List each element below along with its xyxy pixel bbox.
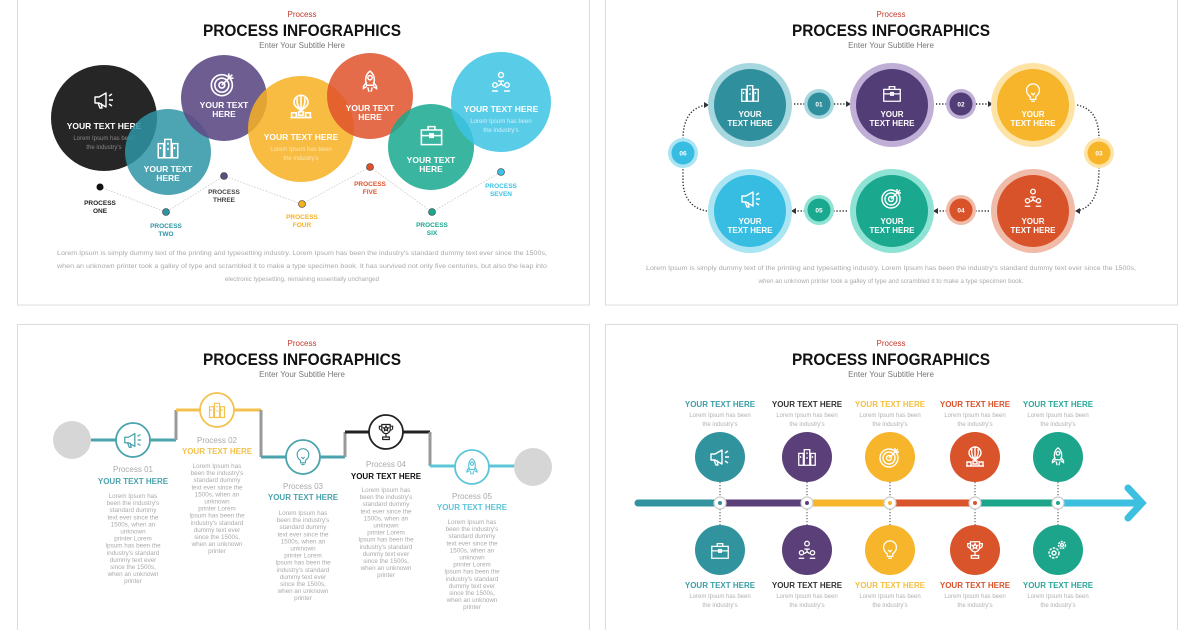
circle: process four: the industry's (283, 156, 319, 162)
step texts: YOUR TEXT HERE (268, 493, 339, 502)
top labels (685, 400, 1094, 428)
step circle 01: TEXT HERE (728, 119, 773, 128)
step texts: YOUR TEXT HERE (437, 503, 508, 512)
step texts: text ever since the (277, 531, 329, 538)
process labels with dots: ONE (93, 208, 108, 215)
step texts: dummy text ever (363, 551, 409, 558)
step texts: Process 01 (113, 465, 154, 474)
step texts: Process 02 (197, 436, 238, 445)
step texts: standard dummy (194, 477, 241, 484)
step texts: Ipsum has been the (275, 560, 331, 567)
circle: process one: Lorem Ipsum has been (73, 136, 135, 142)
step texts: since the 1500s, (194, 534, 240, 541)
step texts: Lorem Ipsum has (193, 463, 241, 470)
number badges: 03 (1095, 150, 1103, 158)
step texts: standard dummy (110, 507, 157, 514)
circle: process seven: Lorem Ipsum has been (470, 119, 532, 125)
step circle 05: TEXT HERE (870, 226, 915, 235)
top icon circles (695, 432, 1083, 482)
step texts: printer Lorem (453, 562, 491, 569)
step texts: when an unknown (360, 565, 412, 572)
top labels: Lorem Ipsum has been (944, 413, 1006, 419)
circle: process four (248, 76, 354, 182)
top labels: YOUR TEXT HERE (772, 400, 843, 409)
step circle 06 (708, 169, 792, 253)
circle: process two (125, 109, 211, 195)
step texts: Lorem Ipsum has (448, 519, 496, 526)
process labels with dots: FIVE (363, 189, 378, 196)
circle: process six: YOUR TEXT (407, 155, 456, 165)
heading: top-right: Enter Your Subtitle Here (848, 41, 934, 50)
step circle 04 (991, 169, 1075, 253)
end circles (53, 421, 91, 459)
bottom labels: YOUR TEXT HERE (1023, 581, 1094, 590)
bottom labels: YOUR TEXT HERE (685, 581, 756, 590)
heading: top-left: Process (288, 10, 316, 19)
step texts: when an unknown (277, 588, 329, 595)
heading: top-right (792, 10, 990, 50)
step texts: been the industry's (191, 470, 243, 477)
bottom labels: the industry's (872, 603, 908, 609)
step texts: been the industry's (107, 500, 159, 507)
step texts: unknown (459, 554, 485, 562)
step texts: Ipsum has been the (105, 543, 161, 550)
top labels: the industry's (872, 422, 908, 428)
bottom labels: Lorem Ipsum has been (776, 594, 838, 600)
step circle 06: YOUR (738, 217, 762, 226)
heading: bottom-left: Process (288, 339, 316, 348)
step texts: standard dummy (280, 524, 327, 531)
step texts: printer Lorem (114, 536, 152, 543)
circle: process four: Lorem Ipsum has been (270, 147, 332, 153)
process labels with dots: THREE (213, 197, 236, 204)
step texts: industry's standard (360, 544, 413, 551)
circle: process seven (451, 52, 551, 152)
process labels with dots (84, 164, 518, 238)
top labels: Lorem Ipsum has been (689, 413, 751, 419)
heading: top-left (203, 10, 401, 50)
step texts: Ipsum has been the (189, 513, 245, 520)
step texts: since the 1500s, (280, 581, 326, 588)
step circle 01 (708, 63, 792, 147)
step texts: Process 05 (452, 492, 493, 501)
circle: process seven: the industry's (483, 128, 519, 134)
step texts: Lorem Ipsum has (362, 487, 410, 494)
step texts: standard dummy (449, 533, 496, 540)
bottom labels: Lorem Ipsum has been (859, 594, 921, 600)
paragraph: top-left: electronic typesetting, remaining essentially unchanged (225, 276, 380, 283)
heading: bottom-right (792, 339, 990, 379)
panel: bottom-left steps (18, 324, 590, 630)
circle: process three: YOUR TEXT (200, 100, 249, 110)
bottom labels: the industry's (702, 603, 738, 609)
step texts: when an unknown (107, 571, 159, 578)
step texts: 1500s, when an (195, 491, 240, 498)
circle: process two: HERE (156, 173, 180, 183)
step texts: printer Lorem (284, 553, 322, 560)
step texts: dummy text ever (280, 574, 326, 581)
process labels with dots: TWO (158, 231, 174, 238)
number badges: 05 (815, 208, 823, 214)
step texts (98, 436, 508, 611)
bottom labels: the industry's (1040, 603, 1076, 609)
step texts: Ipsum has been the (358, 537, 414, 544)
top labels: YOUR TEXT HERE (940, 400, 1011, 409)
step circle 01: YOUR (738, 110, 762, 119)
number badges: 04 (957, 208, 965, 214)
circle: process two: YOUR TEXT (144, 164, 193, 174)
top labels: the industry's (1040, 422, 1076, 428)
circle: process one: the industry's (86, 145, 122, 151)
step circle 04: YOUR (1021, 217, 1045, 226)
step circle 05 (850, 169, 934, 253)
step texts: text ever since the (107, 514, 159, 521)
paragraph: top-right: Lorem Ipsum is simply dummy text of the printing and typesetting industry. Lorem Ipsum has been the industry's standard dummy text ever since the 1500s, (646, 265, 1136, 272)
step texts: dummy text ever (194, 527, 240, 534)
bottom labels: Lorem Ipsum has been (1027, 594, 1089, 600)
paragraph: top-left (56, 250, 548, 283)
step texts: been the industry's (360, 494, 412, 501)
step line (91, 410, 515, 466)
panel: top-right cycle (606, 0, 1178, 305)
step texts: industry's standard (107, 550, 160, 557)
circle: process one (51, 65, 157, 171)
step texts: printer Lorem (198, 506, 236, 513)
step texts: been the industry's (277, 517, 329, 524)
process labels with dots: PROCESS (416, 222, 449, 229)
heading: bottom-right: PROCESS INFOGRAPHICS (792, 350, 990, 369)
step circle 03: TEXT HERE (1011, 119, 1056, 128)
step texts: standard dummy (363, 501, 410, 508)
number badges (668, 89, 1114, 225)
bottom labels: Lorem Ipsum has been (689, 594, 751, 600)
top labels: the industry's (957, 422, 993, 428)
heading: top-right: PROCESS INFOGRAPHICS (792, 21, 990, 40)
process labels with dots: PROCESS (150, 223, 183, 230)
circle: process six: HERE (419, 164, 443, 174)
paragraph: top-left: when an unknown printer took a galley of type and scrambled it to make a type specimen book. It has survived not only five centuries, but also the leap into (56, 263, 548, 270)
step texts: text ever since the (191, 484, 243, 491)
bottom labels (685, 581, 1094, 609)
top labels: Lorem Ipsum has been (1027, 413, 1089, 419)
icon circles (116, 393, 489, 484)
step texts: 1500s, when an (281, 538, 326, 545)
step texts: industry's standard (277, 567, 330, 574)
number badges: 06 (679, 150, 687, 158)
heading: bottom-right: Process (877, 339, 905, 348)
heading: bottom-left: PROCESS INFOGRAPHICS (203, 350, 401, 369)
step texts: 1500s, when an (450, 547, 495, 554)
bottom labels: YOUR TEXT HERE (855, 581, 926, 590)
step circle 05: YOUR (880, 217, 904, 226)
step texts: printer (294, 595, 312, 602)
top labels: YOUR TEXT HERE (685, 400, 756, 409)
step circle 02: YOUR (880, 110, 904, 119)
step texts: printer (463, 604, 481, 611)
step texts: 1500s, when an (111, 521, 156, 528)
process labels with dots: PROCESS (354, 181, 387, 188)
step texts: printer (208, 548, 226, 555)
step texts: text ever since the (360, 508, 412, 515)
step texts: YOUR TEXT HERE (351, 472, 422, 481)
circle: process one: YOUR TEXT HERE (67, 121, 142, 131)
step texts: dummy text ever (449, 583, 495, 590)
top labels: Lorem Ipsum has been (776, 413, 838, 419)
step texts: since the 1500s, (110, 564, 156, 571)
circle: process five: HERE (358, 112, 382, 122)
top labels: YOUR TEXT HERE (855, 400, 926, 409)
step texts: Process 03 (283, 482, 324, 491)
process labels with dots: PROCESS (84, 200, 117, 207)
bottom labels: YOUR TEXT HERE (940, 581, 1011, 590)
process labels with dots: PROCESS (485, 183, 518, 190)
circle: process six (388, 104, 474, 190)
top labels: the industry's (702, 422, 738, 428)
timeline arrow (638, 488, 1142, 518)
dotted process path (100, 167, 501, 212)
heading: bottom-right: Enter Your Subtitle Here (848, 370, 934, 379)
heading: bottom-left (203, 339, 401, 379)
circle: process three: HERE (212, 109, 236, 119)
bottom labels: YOUR TEXT HERE (772, 581, 843, 590)
step texts: unknown (373, 522, 399, 530)
paragraph: top-right (646, 265, 1136, 285)
heading: top-right: Process (877, 10, 905, 19)
dotted connectors (720, 482, 1058, 528)
step texts: printer (377, 572, 395, 579)
circle: process five: YOUR TEXT (346, 103, 395, 113)
step circle 03: YOUR (1021, 110, 1045, 119)
bottom labels: Lorem Ipsum has been (944, 594, 1006, 600)
circle: process three (181, 55, 267, 141)
top labels: YOUR TEXT HERE (1023, 400, 1094, 409)
step texts: text ever since the (446, 540, 498, 547)
number badges: 01 (815, 102, 823, 108)
process labels with dots: PROCESS (286, 214, 319, 221)
timeline nodes (714, 497, 1064, 509)
heading: top-left: PROCESS INFOGRAPHICS (203, 21, 401, 40)
process labels with dots: SEVEN (490, 191, 512, 198)
step texts: since the 1500s, (449, 590, 495, 597)
paragraph: top-left: Lorem Ipsum is simply dummy text of the printing and typesetting industry. Lorem Ipsum has been the industry's standard dummy text ever since the 1500s, (57, 250, 547, 257)
step texts: Process 04 (366, 460, 407, 469)
arrowheads (704, 101, 1080, 214)
step circle 06: TEXT HERE (728, 226, 773, 235)
step circle 04: TEXT HERE (1011, 226, 1056, 235)
step texts: Lorem Ipsum has (279, 510, 327, 517)
step texts: YOUR TEXT HERE (98, 477, 169, 486)
step texts: 1500s, when an (364, 515, 409, 522)
circle: process five (327, 53, 413, 139)
process labels with dots: PROCESS (208, 189, 241, 196)
panel: bottom-right timeline (606, 324, 1178, 630)
step texts: Lorem Ipsum has (109, 493, 157, 500)
step texts: when an unknown (191, 541, 243, 548)
circle: process seven: YOUR TEXT HERE (464, 104, 539, 114)
step texts: printer Lorem (367, 530, 405, 537)
bottom labels: the industry's (789, 603, 825, 609)
step texts: unknown (120, 528, 146, 536)
heading: bottom-left: Enter Your Subtitle Here (259, 370, 345, 379)
step texts: industry's standard (191, 520, 244, 527)
process labels with dots: FOUR (293, 222, 312, 229)
top labels: Lorem Ipsum has been (859, 413, 921, 419)
top labels: the industry's (789, 422, 825, 428)
step circle 02: TEXT HERE (870, 119, 915, 128)
bottom icon circles (695, 525, 1083, 575)
process labels with dots: SIX (427, 230, 438, 237)
step texts: Ipsum has been the (444, 569, 500, 576)
step texts: printer (124, 578, 142, 585)
step texts: since the 1500s, (363, 558, 409, 565)
panel: top-left wave circles (18, 0, 590, 305)
step texts: industry's standard (446, 576, 499, 583)
step texts: unknown (204, 498, 230, 506)
step texts: unknown (290, 546, 316, 552)
step texts: been the industry's (446, 526, 498, 533)
step circle 03 (991, 63, 1075, 147)
heading: top-left: Enter Your Subtitle Here (259, 41, 345, 50)
step texts: dummy text ever (110, 557, 156, 564)
step circle 02 (850, 63, 934, 147)
step texts: YOUR TEXT HERE (182, 447, 253, 456)
step texts: when an unknown (446, 597, 498, 604)
circle: process four: YOUR TEXT HERE (264, 132, 339, 142)
number badges: 02 (957, 102, 965, 108)
bottom labels: the industry's (957, 603, 993, 609)
dotted connectors (683, 104, 1099, 211)
paragraph: top-right: when an unknown printer took a galley of type and scrambled it to make a type specimen book. (758, 278, 1024, 285)
